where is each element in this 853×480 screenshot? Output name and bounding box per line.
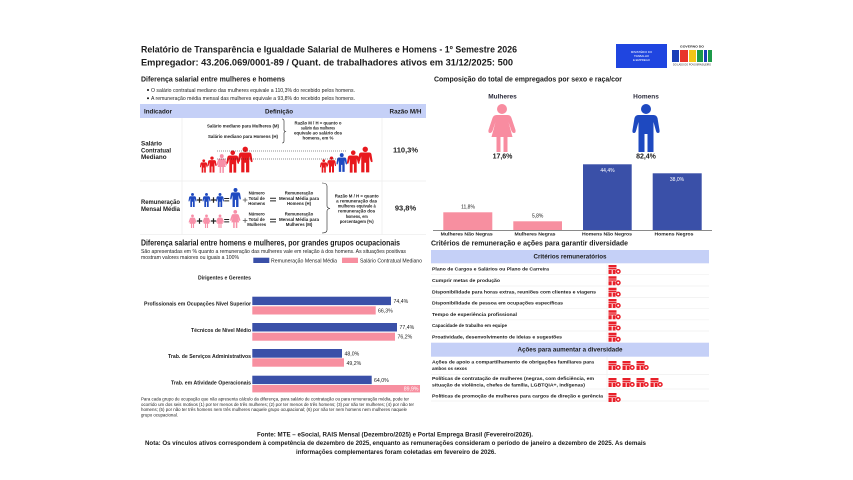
- row label: remuneração mensal média: Remuneração: [141, 199, 180, 206]
- definition: razão remuneração: remuneração dos: [338, 209, 376, 214]
- bar chart: composição: Mulheres Não Negras: [441, 232, 493, 238]
- formula: homens: Homens (H): [287, 201, 312, 206]
- group: atividade operacionais: Trab. em Atividade Operacionais: [171, 381, 251, 387]
- group: serviços administrativos: 49,2%: [346, 361, 362, 367]
- table headers: Indicador: [144, 108, 173, 115]
- row label: salário contratual mediano: Salário: [141, 140, 162, 148]
- formula: mulheres: Remuneração: [285, 212, 314, 216]
- group: serviços administrativos: 48,0%: [344, 351, 360, 357]
- definition: salário mediano: homens, em %: [302, 136, 334, 141]
- text block: bullets: [147, 88, 355, 102]
- logo: ministério: MINISTÉRIO DO: [631, 49, 653, 54]
- text block: explicação: São apresentadas em % quanto a remuneração das mulheres vale em relação à dos homens. As situações positivas: [141, 249, 406, 255]
- logo: ministério: [616, 44, 667, 68]
- row label: salário contratual mediano: Mediano: [141, 154, 167, 161]
- panel: indicator table: [140, 104, 426, 234]
- bar chart: composição: 5,8%: [532, 214, 544, 220]
- icon: mulheres: Mulheres: [488, 94, 517, 101]
- bar chart: composição: 38,0%: [670, 177, 685, 183]
- icon: mulheres: [488, 94, 517, 161]
- text block: nota de rodapé do gráfico: Para cada grupo de ocupação que não apresenta cálculo da diferença, para salário de contratação ou para remuneração média, pode ter: [141, 397, 409, 402]
- text block: bullets: A remuneração média mensal das mulheres equivale a 93,8% do recebido pelos homens.: [151, 96, 355, 102]
- heading: critérios de remuneração: Critérios de remuneração e ações para garantir diversidade: [431, 238, 628, 248]
- formula: homens: Remuneração: [285, 190, 314, 196]
- group: técnicos de nível médio: [191, 323, 415, 341]
- footer: fonte e nota: [145, 431, 646, 456]
- definition: salário mediano: Salário mediano para Homens (H): [208, 134, 279, 139]
- icon: homens: [632, 94, 660, 161]
- formula: homens: Total de: [249, 196, 265, 201]
- footer: fonte e nota: informações complementares foram coletadas em fevereiro de 2026.: [296, 449, 496, 456]
- row label: remuneração mensal média: [141, 199, 180, 213]
- group: técnicos de nível médio: 77,4%: [400, 325, 415, 331]
- panel: critérios remuneratórios: Critérios remuneratórios: [534, 255, 607, 261]
- definition: razão remuneração: homens, em: [346, 214, 368, 219]
- panel: ações para aumentar a diversidade: Ações de apoio a compartilhamento de obrigações familiares para: [432, 360, 594, 366]
- group: técnicos de nível médio: 76,2%: [398, 334, 413, 340]
- logo: governo do brasil: GOVERNO DO: [680, 44, 705, 48]
- formula: homens: Número: [249, 190, 265, 196]
- group: profissionais nível superior: Profissionais em Ocupações Nível Superior: [144, 302, 251, 308]
- title: Empregador: 43.206.069/0001-89 / Quant. de trabalhadores ativos em 31/12/2025: 500: [141, 58, 513, 68]
- text block: nota de rodapé do gráfico: homens; (5) por não ter três homens nem três mulheres naquele grupo ocupacional; (6) por não ter nem homens nem mulheres naquele: [141, 407, 407, 412]
- logo: governo do brasil: [672, 44, 712, 66]
- row label: salário contratual mediano: [141, 140, 171, 161]
- formula: mulheres: Número: [249, 212, 265, 216]
- row label: remuneração mensal média: Mensal Média: [141, 206, 180, 213]
- heading: diferença salarial entre mulheres e homens: Diferença salarial entre mulheres e homens: [141, 74, 285, 84]
- footer: fonte e nota: Nota: Os vínculos ativos correspondem à competência de dezembro de 2025,: [145, 440, 371, 447]
- panel: ações para aumentar a diversidade: situação de violência, chefes de família, LGBTQIA+, Indígenas): [432, 382, 585, 388]
- text block: nota de rodapé do gráfico: grupo ocupacional.: [141, 412, 178, 417]
- formula: homens: Mensal Média para: [279, 196, 320, 201]
- group: técnicos de nível médio: Técnicos de Nível Médio: [191, 328, 251, 334]
- title: [141, 44, 517, 68]
- formula: mulheres: Total de: [249, 217, 265, 222]
- formula: mulheres: Mulheres (M): [286, 222, 313, 227]
- text block: bullets: O salário contratual mediano das mulheres equivale a 110,3% do recebido pelos homens.: [151, 88, 355, 94]
- panel: ações para aumentar a diversidade: [431, 343, 709, 402]
- panel: critérios remuneratórios: Capacidade de trabalho em equipe: [432, 323, 507, 329]
- category: dirigentes e gerentes: Dirigentes e Gerentes: [198, 276, 251, 282]
- value: 110,3%: 110,3%: [393, 146, 418, 155]
- bar chart: composição: Mulheres Negras: [514, 232, 556, 238]
- table headers: Definição: [265, 108, 293, 115]
- logo: ministério: TRABALHO: [634, 54, 650, 58]
- panel: critérios remuneratórios: Proatividade, desenvolvimento de ideias e sugestões: [432, 334, 562, 340]
- panel: ações para aumentar a diversidade: Ações para aumentar a diversidade: [518, 348, 623, 354]
- heading: composição do total de empregados: Composição do total de empregados por sexo e raça/cor: [434, 75, 622, 84]
- definition: salário mediano: salário das mulheres: [301, 125, 335, 130]
- panel: ações para aumentar a diversidade: Políticas de promoção de mulheres para cargos de direção e gerência: [432, 394, 603, 400]
- row label: salário contratual mediano: Contratual: [141, 147, 171, 154]
- legend: Salário Contratual Mediano: [360, 258, 422, 264]
- definition: salário mediano: Razão M / H = quanto o: [294, 120, 342, 125]
- definition: salário mediano: [207, 119, 343, 143]
- group: serviços administrativos: Trab. de Serviços Administrativos: [168, 354, 251, 360]
- bar chart: grupos ocupacionais: [144, 276, 420, 393]
- icon: mulheres: 17,6%: [493, 154, 513, 161]
- definition: razão remuneração: a remuneração das: [336, 198, 378, 203]
- panel: critérios remuneratórios: Disponibilidade de pessoa em ocupações específicas: [432, 301, 563, 307]
- heading: diferença por grupos ocupacionais: Diferença salarial entre homens e mulheres, por grandes grupos ocupacionais: [141, 238, 400, 248]
- panel: ações para aumentar a diversidade: Políticas de contratação de mulheres (negras, com deficiência, em: [432, 376, 595, 382]
- group: atividade operacionais: 64,0%: [374, 378, 389, 384]
- text block: explicação: mostram valores maiores ou iguais a 100%: [141, 255, 240, 261]
- definition: salário mediano: equivale ao salário dos: [294, 131, 343, 136]
- panel: critérios remuneratórios: Disponibilidade para horas extras, reuniões com clientes e viagens: [432, 290, 596, 296]
- footer: fonte e nota: Fonte: MTE – eSocial, RAIS Mensal (Dezembro/2025) e Portal Emprega Brasil (Fevereiro/2026).: [257, 431, 533, 438]
- icon: homens: 82,4%: [636, 154, 657, 161]
- formula: mulheres: Mensal Média para: [279, 217, 320, 222]
- definition: razão remuneração: Razão M / H = quanto: [335, 193, 379, 198]
- text block: nota de rodapé do gráfico: ocorrido um dos seis motivos (1) por ter menos de três mulheres; (2) por ter menos de três homens; (3) por não ter mulheres; (4) por não ter: [141, 402, 414, 407]
- group: atividade operacionais: 89,9%: [404, 387, 419, 393]
- bar chart: composição: Homens Negros: [654, 232, 694, 238]
- definition: razão remuneração: [322, 183, 379, 233]
- group: profissionais nível superior: 66,3%: [378, 308, 393, 314]
- text block: nota de rodapé do gráfico: [141, 397, 414, 417]
- footer: fonte e nota: enquanto as remunerações consideram o período de janeiro a dezembro de 2025. As demais: [372, 440, 646, 447]
- text block: explicação: [141, 249, 406, 261]
- formula: mulheres: [189, 210, 320, 228]
- formula: homens: [189, 188, 320, 207]
- formula: homens: Homens: [248, 201, 266, 206]
- formula: mulheres: Mulheres: [247, 222, 267, 227]
- panel: critérios remuneratórios: Cumprir metas de produção: [432, 278, 500, 284]
- legend: Remuneração Mensal Média: [271, 258, 337, 264]
- chart: pessoas ordenadas por salário: [200, 147, 373, 173]
- logo: governo do brasil: DO LADO DO POVO BRASILEIRO: [673, 62, 711, 66]
- bar chart: composição: Homens Não Negros: [582, 232, 632, 238]
- value: 93,8%: 93,8%: [395, 204, 416, 213]
- icon: homens: Homens: [633, 94, 659, 101]
- table headers: [144, 108, 422, 115]
- group: atividade operacionais: [171, 376, 420, 393]
- group: profissionais nível superior: 74,4%: [394, 299, 409, 305]
- panel: ações para aumentar a diversidade: ambos os sexos: [432, 366, 467, 372]
- panel: critérios remuneratórios: Tempo de experiência profissional: [432, 312, 518, 318]
- definition: salário mediano: Salário mediano para Mulheres (M): [207, 124, 280, 128]
- definition: razão remuneração: porcentagem (%): [340, 219, 374, 224]
- panel: critérios remuneratórios: Plano de Cargos e Salários ou Plano de Carreira: [432, 267, 549, 273]
- panel: critérios remuneratórios: [431, 250, 709, 342]
- logo: ministério: E EMPREGO: [633, 58, 651, 62]
- group: serviços administrativos: [168, 349, 362, 367]
- group: profissionais nível superior: [144, 297, 409, 314]
- bar chart: composição: [433, 164, 712, 238]
- legend: [253, 258, 422, 264]
- bar chart: composição: 44,4%: [600, 168, 615, 174]
- definition: razão remuneração: mulheres equivale à: [338, 204, 376, 208]
- table headers: Razão M/H: [390, 108, 422, 115]
- bar chart: composição: 11,8%: [461, 204, 475, 210]
- title: Relatório de Transparência e Igualdade Salarial de Mulheres e Homens - 1º Semestre 2026: [141, 44, 517, 56]
